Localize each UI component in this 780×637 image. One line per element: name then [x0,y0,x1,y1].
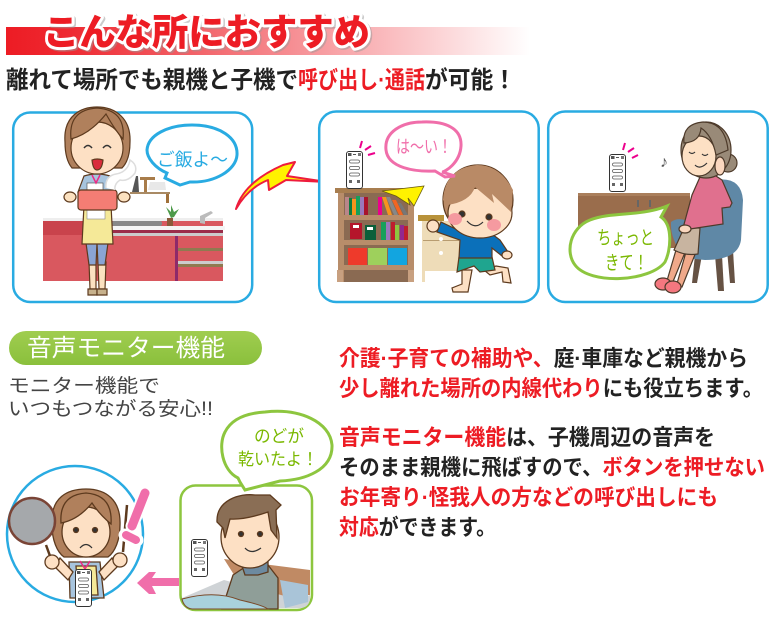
icon: handset on mother [76,570,92,606]
icon: frying pan [9,498,55,544]
speech bubble: come here: きて！ [605,253,648,274]
panel: boy with bookshelf [319,112,539,302]
bed [182,559,310,608]
speech bubble: thirsty: 乾いたよ！ [238,450,318,469]
text block: monitor intro [8,375,213,420]
speech bubble: hai [386,122,461,177]
icon: ring marks [623,143,638,158]
speech bubble: come here [570,206,670,279]
icon: music note: ♪ [660,154,668,171]
title banner: こんな所におすすめ [44,14,372,54]
text block: monitor description [339,425,765,540]
speech bubble: meal call: ご飯よ〜 [157,150,228,170]
mother character [45,489,127,598]
armchair [671,179,743,291]
icon: ring marks [360,141,375,155]
text block: monitor intro: モニター機能で [8,375,160,397]
speech bubble: meal call [147,125,237,185]
bookshelf [335,188,417,282]
panel: mother in kitchen [13,107,252,302]
kitchen counter [43,176,225,281]
subtitle: 離れて場所でも親機と子機で [6,67,298,94]
heading: voice monitor pill: 音声モニター機能 [27,335,225,362]
arrow: lightning bolt [236,162,327,209]
boy character [427,165,513,292]
speech bubble: thirsty [222,411,332,490]
icon: paper plane [382,186,424,206]
nightstand [418,215,460,282]
text block: monitor description: 対応ができます。 [339,515,496,540]
title banner [6,12,530,55]
subtitle: が可能！ [425,66,516,94]
icon: handset on cabinet [610,154,626,192]
text block: monitor intro: いつもつながる安心!! [8,398,213,420]
panel: grandmother in chair [548,112,768,302]
speech bubble: hai: は〜い！ [396,137,452,157]
cabinet [578,193,690,248]
icon: exclamation mark [125,493,145,540]
mother character [64,107,130,295]
arrow: pink left [137,572,179,594]
text block: monitor description: 音声モニター機能は、子機周辺の音声を [339,425,715,450]
lanyard [80,561,90,569]
speech bubble: come here: ちょっと [597,228,654,249]
blanket [182,595,268,609]
speech bubble: thirsty: のどが [254,427,304,446]
text block: intercom use [339,346,763,401]
text block: intercom use: 少し離れた場所の内線代わりにも役立ちます。 [339,376,763,401]
man character [217,495,281,609]
heading: voice monitor pill [9,331,262,365]
steam [106,160,136,190]
text block: monitor description: そのまま親機に飛ばすので、ボタンを押せない [339,455,765,480]
title banner: こんな所におすすめ [43,12,370,53]
grandmother character [655,122,737,293]
text block: monitor description: お年寄り·怪我人の方などの呼び出しにも [339,485,718,510]
icon: handset on shelf [346,152,362,188]
panel: mother with alert [7,466,145,606]
subtitle [6,66,516,94]
subtitle: 呼び出し·通話 [298,67,425,94]
icon: handset by bed [192,540,208,576]
panel: man in bed [180,411,332,610]
text block: intercom use: 介護·子育ての補助や、庭·車庫など親機から [339,346,748,371]
